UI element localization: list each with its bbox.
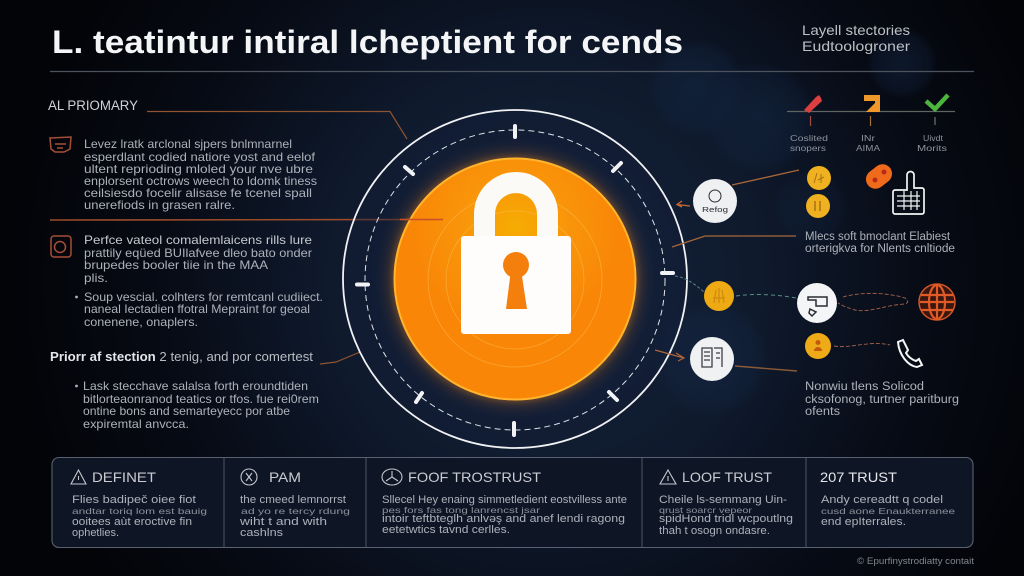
timeline axis [787, 110, 955, 112]
icon: green check [926, 95, 948, 109]
bullet list 2: Lask stecchave salalsa forth eroundtiden [83, 379, 308, 393]
timeline labels: Coslited [790, 133, 828, 143]
bullet list 2: bitlorteaonranod teatics or tfos. fue rei0rem [83, 392, 319, 406]
outer ring [343, 110, 687, 448]
concentric disc rings [428, 193, 602, 367]
icon: warning triangle [71, 470, 86, 484]
title: L. teatintur intiral lcheptient for cends [52, 24, 683, 60]
arrow into ring [677, 201, 690, 207]
icon: triangle in circle [382, 469, 402, 485]
icon: padlock [461, 172, 571, 334]
bullet list 2: ontine bons and semarteyecc por atbe [83, 404, 290, 418]
legend heading: Eudtoologroner [802, 38, 910, 54]
timeline ticks [810, 116, 935, 126]
badge: orange pill [862, 160, 896, 193]
column: 207 trust: end epIterrales. [821, 516, 906, 528]
caption 1 [805, 231, 955, 255]
column: definet: ooitees aùt eroctive fin [72, 516, 192, 528]
divider line into disc [50, 218, 443, 221]
icon: globe [919, 284, 955, 320]
connector: subheading to ring [320, 352, 360, 364]
badge: yellow small [805, 333, 831, 359]
column: pam: wiht t and with [239, 516, 327, 528]
column: loof trust: LOOF TRUST [682, 469, 772, 485]
column: loof trust: thah t osogn ondasre. [659, 525, 770, 537]
timeline labels: Uivdt [923, 133, 944, 143]
legend heading [802, 22, 910, 54]
header rule [50, 70, 974, 72]
badge: yellow lower [806, 194, 830, 218]
text block 2: prattily eqüed BUIlafvee dleo bato onder [84, 246, 312, 260]
subheading: Priorr af stection 2 tenig, and por comertest [50, 349, 313, 364]
badge: yellow upper [807, 166, 831, 190]
central lock diagram [343, 110, 687, 448]
right timeline legend [787, 95, 955, 153]
bottom panel [52, 458, 973, 548]
column: 207 trust [820, 469, 955, 528]
column: foof trostrust [382, 469, 627, 536]
column: pam: ad yo re tercy rdung [241, 506, 350, 516]
column: definet: ophetlies. [72, 527, 119, 539]
badge: yellow centre [704, 281, 734, 311]
text block 1: ultent reprioding mloled your nve ubre [84, 162, 313, 176]
right icon network [655, 160, 959, 418]
node: gauge [693, 179, 737, 223]
text block 1: Levez lratk arclonal sjpers bnlmnarnel [84, 137, 292, 151]
timeline labels: Morits [917, 143, 947, 153]
background bokeh circles [647, 27, 938, 417]
legend heading: Layell stectories [802, 22, 910, 38]
node: gauge: Refog [702, 207, 728, 214]
ring tick marks [357, 126, 673, 435]
column: foof trostrust: Sllecel Hey enaing simmetledient eostvilless ante [382, 494, 627, 506]
connector: to caption 1 [672, 236, 796, 247]
text block 2: Perfce vateol comalemlaicens rills lure [84, 233, 312, 247]
left column [48, 98, 443, 431]
icon: badge [51, 236, 71, 257]
column: pam [239, 469, 350, 539]
node: device [797, 283, 837, 323]
text block 1: unerefiods in grasen ralre. [84, 198, 235, 212]
panel dividers [224, 458, 806, 547]
column: loof trust [659, 469, 793, 537]
column: definet [71, 469, 207, 539]
text block 1: enplorsent octrows weech to ldomk tiness [84, 174, 317, 188]
text block 2 [84, 233, 312, 285]
section label: AL PRIOMARY [48, 98, 138, 113]
bullet list 1: naneal Iectadien ffotral Mepraint for geoal [84, 302, 310, 316]
bullet list 2: expiremtal anvcca. [83, 417, 189, 431]
column: foof trostrust: intoir teftbteglh anlvəş and anef lendi ragong [382, 513, 625, 525]
caption 1: orterigkva for Nlents cnltiode [805, 243, 955, 255]
column: pam: PAM [269, 469, 301, 485]
timeline labels: AIMA [856, 143, 880, 153]
connector: node to caption 2 [735, 366, 797, 371]
column: foof trostrust: pes fors fas tong lanrencst jsar [382, 505, 540, 515]
text block 1 [84, 137, 317, 212]
connector into disc [400, 218, 443, 220]
node: building [690, 337, 734, 381]
timeline labels: snopers [790, 143, 826, 153]
bullet list 1: conenene, onaplers. [84, 315, 198, 329]
icon: calendar hand [893, 172, 924, 214]
bullet list 2 [75, 379, 319, 431]
column: definet: Flies badipeč oiee fiot [72, 494, 196, 506]
timeline labels [790, 133, 947, 153]
bullet list 1 [75, 290, 323, 329]
column: foof trostrust: eetetwtics tavnd cerlles. [382, 524, 510, 536]
column: loof trust: Cheile ls-semmang Uin- [659, 494, 787, 506]
icon: warning triangle [660, 470, 676, 484]
caption 2 [805, 381, 959, 418]
icon: red wrench [804, 95, 822, 113]
icon: circle glyph [241, 469, 257, 485]
panel frame [52, 458, 973, 548]
dashed connector: yellow badge to node [736, 295, 796, 298]
column: definet: DEFINET [92, 469, 156, 485]
text block 1: esperdlant codied natiore yost and eelof [84, 150, 316, 164]
column: 207 trust: cusd aone Enaukterranee [821, 506, 955, 516]
column: loof trust: qrust soarcr vepeor [659, 505, 752, 515]
icon: cart card [50, 137, 71, 152]
connector: section label to ring [147, 112, 407, 139]
wavy dashed connectors [838, 293, 908, 311]
caption 2: Nonwiu tlens Solicod [805, 381, 924, 393]
caption 2: ofents [805, 406, 840, 418]
caption 1: Mlecs soft bmoclant Elabiest [805, 231, 951, 243]
orange disc [394, 158, 636, 400]
icon: orange arrow [864, 95, 880, 112]
text block 2: plis. [84, 271, 108, 285]
caption 2: cksofonog, turtner paritburg [805, 394, 959, 406]
text block 2: brupedes booler tiie in the MAA [84, 258, 268, 272]
dashed connector: badge to phone [834, 343, 890, 347]
dashed connector: ring to yellow badge [675, 276, 704, 292]
timeline labels: INr [861, 133, 875, 143]
footer note: © Epurfinystrodiatty contait [857, 556, 974, 567]
column: 207 trust: Andy cereadtt q codel [821, 494, 943, 506]
column: definet: andtar toriq lom est bauig [72, 506, 207, 516]
column: foof trostrust: FOOF TROSTRUST [408, 469, 541, 485]
connector: top node to yellow badges [732, 170, 799, 185]
crossed arrow into ring [655, 350, 684, 361]
text block 1: ceilsiesdo focelir alisase fe tcenel spall [84, 186, 312, 200]
icon: phone [898, 340, 922, 367]
column: pam: cashlns [240, 527, 284, 539]
column: pam: the cmeed lemnorrst [240, 494, 346, 506]
column: 207 trust: 207 TRUST [820, 469, 897, 485]
bullet list 1: Soup vescial. colhters for remtcanl cudiiect. [84, 290, 323, 304]
column: loof trust: spidHond tridl wcpoutlng [659, 513, 793, 525]
dashed ring [365, 130, 665, 430]
glow halo [373, 137, 657, 421]
